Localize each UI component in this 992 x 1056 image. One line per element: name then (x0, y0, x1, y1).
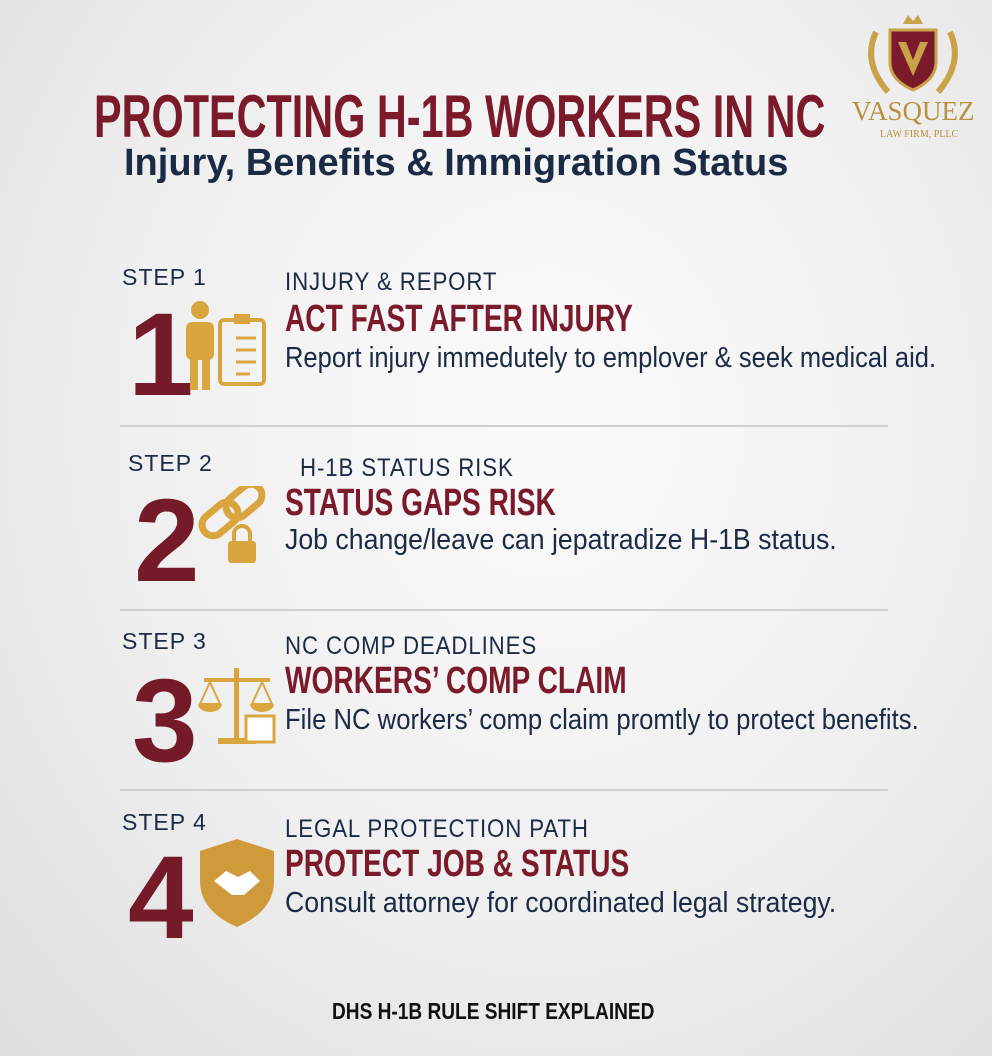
icon: scales with calendar (198, 668, 276, 744)
step 3: WORKERS’ COMP CLAIM (285, 660, 627, 702)
icon: chain link with lock (198, 486, 266, 563)
step 4: STEP 4 (122, 809, 207, 835)
step 1: Report injury immedutely to emplover & seek medical aid. (285, 342, 936, 374)
step 1: INJURY & REPORT (285, 268, 497, 296)
step 4: Consult attorney for coordinated legal strategy. (285, 887, 836, 919)
logo (852, 15, 975, 140)
step 1: 1 (128, 289, 194, 421)
step 2 (128, 450, 837, 607)
step 2: STATUS GAPS RISK (285, 482, 556, 524)
step 3: 3 (132, 655, 198, 787)
step 3: File NC workers’ comp claim promtly to protect benefits. (285, 704, 919, 736)
step 2: H-1B STATUS RISK (300, 454, 514, 482)
subtitle: Injury, Benefits & Immigration Status (124, 142, 788, 184)
step 3: NC COMP DEADLINES (285, 632, 537, 660)
title: PROTECTING H-1B WORKERS IN NC (94, 83, 825, 150)
step 1: STEP 1 (122, 264, 207, 290)
step 4: 4 (128, 832, 194, 964)
step 4: LEGAL PROTECTION PATH (285, 815, 589, 843)
footer: DHS H-1B RULE SHIFT EXPLAINED (332, 998, 654, 1024)
step 4 (122, 809, 836, 964)
step 3 (122, 628, 919, 787)
logo: VASQUEZ (852, 96, 975, 126)
logo: LAW FIRM, PLLC (880, 129, 958, 140)
step 1: ACT FAST AFTER INJURY (285, 298, 633, 340)
icon: shield with handshake (200, 839, 274, 927)
step 1 (122, 264, 936, 421)
step 2: 2 (134, 475, 200, 607)
step 2: STEP 2 (128, 450, 213, 476)
icon: injured person with clipboard (186, 301, 266, 390)
step 3: STEP 3 (122, 628, 207, 654)
step 2: Job change/leave can jepatradize H-1B status. (285, 524, 837, 556)
step 4: PROTECT JOB & STATUS (285, 843, 629, 885)
